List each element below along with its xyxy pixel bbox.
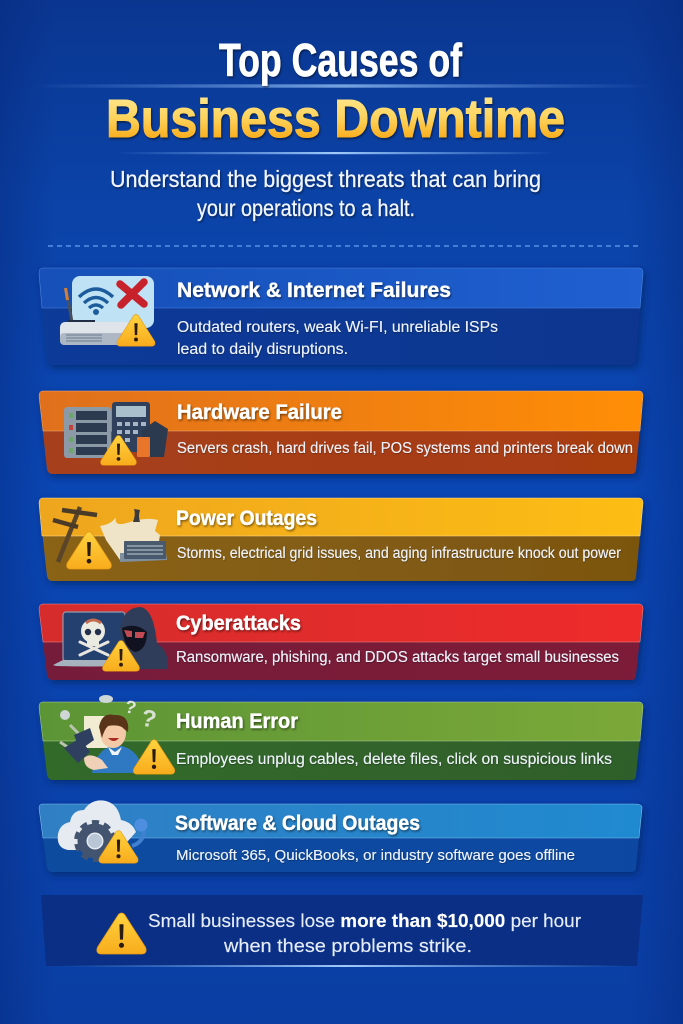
subtitle <box>110 166 541 221</box>
description: Storms, electrical grid issues, and aging infrastructure knock out power <box>177 545 621 562</box>
panel: human error <box>39 695 643 780</box>
title line: Top Causes of: Top Causes of <box>219 34 463 86</box>
panel: power outages <box>39 498 643 581</box>
panel: hardware failure <box>39 391 643 474</box>
heading: Cyberattacks <box>176 611 301 635</box>
heading: Network & Internet Failures <box>177 278 451 302</box>
title <box>30 34 653 88</box>
icon: laptop with skull and hooded hacker <box>53 607 168 671</box>
description: Microsoft 365, QuickBooks, or industry software goes offline <box>176 848 575 864</box>
icon: confused employee holding plugs <box>60 695 175 774</box>
subtitle: your operations to a halt. <box>197 195 415 221</box>
subtitle: Understand the biggest threats that can bring <box>110 166 541 192</box>
callout: cost of downtime <box>41 895 643 967</box>
description <box>177 319 498 358</box>
description: Servers crash, hard drives fail, POS systems and printers break down <box>177 440 633 457</box>
description: lead to daily disruptions. <box>177 341 348 358</box>
icon: storm, power pole and building <box>53 507 167 569</box>
icon: confused employee holding plugs: ? <box>123 696 138 718</box>
title highlight: Business Downtime: Business Downtime <box>106 89 565 149</box>
panel: cyberattacks <box>39 604 643 680</box>
icon: confused employee holding plugs: ? <box>139 704 159 734</box>
description: Outdated routers, weak Wi-FI, unreliable ISPs <box>177 319 498 336</box>
callout text <box>148 910 581 956</box>
dashed divider <box>48 245 640 247</box>
callout text: Small businesses lose more than $10,000 per hour <box>148 910 581 931</box>
icon: warning triangle <box>97 913 146 954</box>
heading: Human Error <box>176 709 299 733</box>
panel: network and internet failures <box>39 268 643 365</box>
heading: Hardware Failure <box>177 400 342 424</box>
panel: software and cloud outages <box>39 800 642 872</box>
description: Employees unplug cables, delete files, click on suspicious links <box>176 751 612 768</box>
heading: Software & Cloud Outages <box>175 811 420 835</box>
heading: Power Outages <box>176 506 317 530</box>
callout text: when these problems strike. <box>223 935 472 956</box>
icon: cloud, gear and warning <box>58 800 148 863</box>
description: Ransomware, phishing, and DDOS attacks target small businesses <box>176 649 619 666</box>
icon: router with no wifi <box>60 276 155 346</box>
icon: server, POS terminal and printer <box>64 402 168 465</box>
